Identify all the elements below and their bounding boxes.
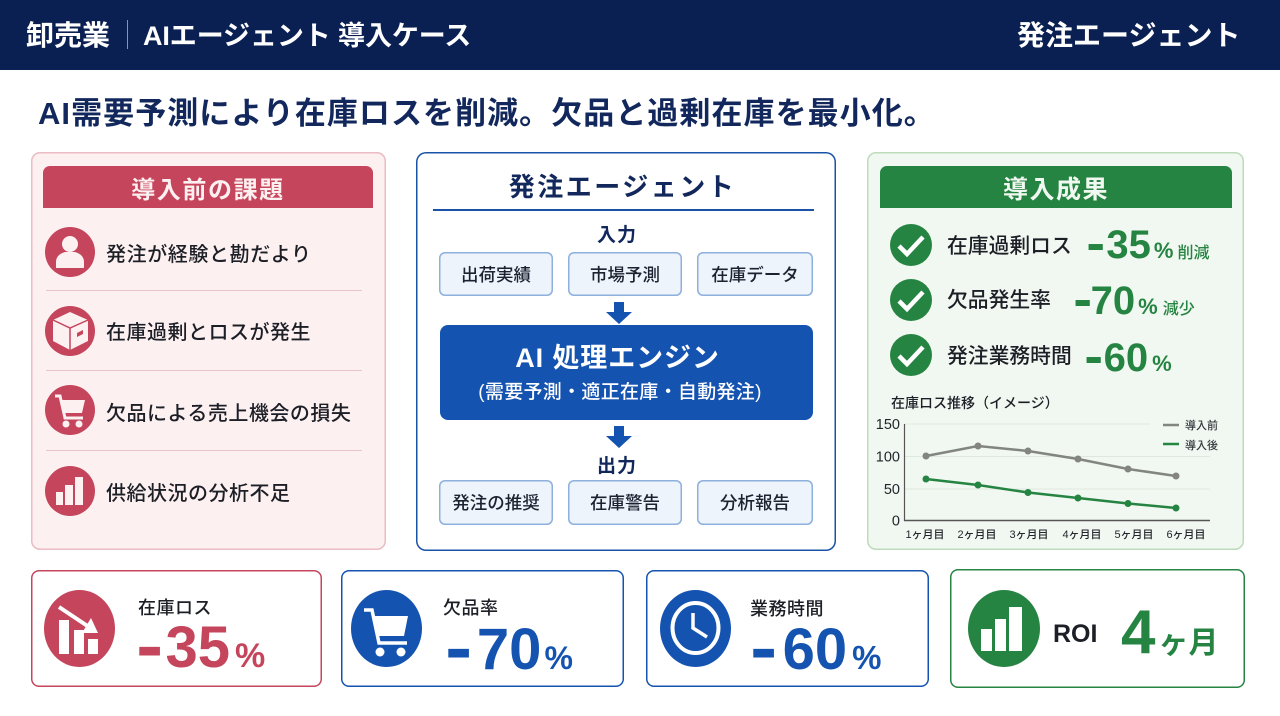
- KPI value: [445, 607, 573, 688]
- engine title: AI 処理エンジン: [515, 343, 720, 373]
- divider 1: [46, 290, 362, 291]
- arrow: engine to output: [606, 426, 632, 448]
- panel: ordering agent flow: [416, 152, 836, 551]
- panel heading: results: 導入成果: [1003, 176, 1109, 204]
- series: after introduction: [923, 476, 1179, 511]
- panel: results: [867, 152, 1244, 550]
- divider 3: [46, 450, 362, 451]
- issue text: 欠品による売上機会の損失: [106, 403, 351, 425]
- heading underline: [433, 209, 814, 210]
- y axis labels: 100: [876, 450, 900, 466]
- x axis labels: 1ヶ月目: [905, 528, 945, 541]
- KPI value: 35%: [166, 615, 265, 680]
- y axis labels: [876, 417, 900, 530]
- KPI value: [750, 607, 881, 688]
- icon: person: [45, 227, 95, 277]
- icon: cart: [45, 385, 95, 435]
- icon: cart: [351, 590, 422, 667]
- KPI value: 70%: [477, 617, 573, 682]
- header bar: [0, 0, 1280, 70]
- KPI value: [136, 605, 265, 686]
- input: shipment records: 出荷実績: [461, 265, 531, 285]
- result value: [1086, 216, 1210, 271]
- x axis labels: 6ヶ月目: [1166, 528, 1206, 541]
- series: before introduction: [923, 443, 1179, 479]
- icon: bar chart: [45, 466, 95, 516]
- output boxes: [439, 480, 813, 525]
- issue: overstock and loss: [45, 306, 311, 356]
- issue: lack of supply analysis: [45, 466, 290, 516]
- KPI label: 欠品率: [443, 598, 498, 618]
- KPI value: 60%: [783, 617, 881, 682]
- result value: -: [1086, 216, 1105, 271]
- x axis labels: 3ヶ月目: [1009, 528, 1049, 541]
- chart legend: 導入前: [1185, 418, 1218, 432]
- arrow: input to engine: [606, 302, 632, 324]
- AI processing engine: [440, 325, 813, 420]
- result: stockout rate: [890, 272, 1195, 327]
- panel heading: results: [880, 166, 1232, 208]
- result value: -: [1084, 329, 1103, 384]
- x axis labels: [905, 528, 1206, 541]
- issue text: 供給状況の分析不足: [106, 483, 290, 505]
- input: market forecast: [568, 252, 682, 296]
- chart legend: [1163, 418, 1218, 452]
- panel heading: issues: 導入前の課題: [131, 177, 285, 204]
- result label: 発注業務時間: [947, 345, 1072, 368]
- x axis labels: 4ヶ月目: [1062, 528, 1102, 541]
- output: analysis report: [697, 480, 813, 525]
- y axis labels: 50: [884, 482, 900, 498]
- icon: box: [45, 306, 95, 356]
- x axis labels: 5ヶ月目: [1114, 528, 1154, 541]
- KPI label: 在庫ロス: [138, 598, 212, 618]
- header agent name: 発注エージェント: [1017, 20, 1240, 51]
- icon: check: [890, 334, 932, 376]
- result value: [1084, 329, 1172, 384]
- icon: declining bars: [44, 590, 115, 667]
- KPI card: work time: [646, 570, 929, 687]
- issue: lost sales from stockouts: [45, 385, 351, 435]
- engine subtitle: (需要予測・適正在庫・自動発注): [478, 382, 762, 403]
- icon: check: [890, 224, 932, 266]
- ROI label: ROI: [1053, 620, 1097, 648]
- input: shipment records: [439, 252, 553, 296]
- result label: 在庫過剰ロス: [947, 235, 1072, 258]
- header vertical divider line: [127, 20, 128, 49]
- input: market forecast: 市場予測: [590, 265, 660, 285]
- output: analysis report: 分析報告: [720, 493, 790, 513]
- issue: ordering by experience: [45, 227, 312, 277]
- KPI value: -: [136, 605, 163, 686]
- input: inventory data: [697, 252, 813, 296]
- output: order recommendation: [439, 480, 553, 525]
- result value: 60%: [1104, 336, 1172, 380]
- chart title: 在庫ロス推移（イメージ）: [891, 395, 1059, 411]
- panel: before introduction issues: [31, 152, 386, 550]
- y axis labels: 0: [892, 514, 900, 530]
- x axis labels: 2ヶ月目: [957, 528, 997, 541]
- icon: check: [890, 279, 932, 321]
- output: inventory alert: 在庫警告: [590, 493, 660, 513]
- panel heading: ordering agent: 発注エージェント: [509, 172, 736, 202]
- result value: [1073, 272, 1195, 327]
- result: ordering work time: [890, 329, 1172, 384]
- icon: clock: [660, 590, 731, 667]
- KPI card: stockout rate: [341, 570, 624, 687]
- output: inventory alert: [568, 480, 682, 525]
- input label: 入力: [597, 225, 637, 246]
- line chart: inventory loss trend: [876, 395, 1218, 541]
- header title: 卸売業: [26, 20, 110, 51]
- result value: 70% 減少: [1091, 279, 1195, 323]
- output label: 出力: [597, 456, 637, 477]
- headline: AI需要予測により在庫ロスを削減。欠品と過剰在庫を最小化。: [38, 96, 936, 131]
- result label: 欠品発生率: [947, 289, 1051, 312]
- input: inventory data: 在庫データ: [711, 265, 799, 285]
- KPI label: 業務時間: [750, 599, 824, 619]
- panel heading: issues: [43, 166, 373, 208]
- ROI value: 4ヶ月: [1121, 598, 1218, 667]
- KPI value: -: [750, 607, 777, 688]
- result: excess inventory loss: [890, 216, 1210, 271]
- issue text: 在庫過剰とロスが発生: [106, 322, 311, 344]
- divider 2: [46, 370, 362, 371]
- KPI value: -: [445, 607, 472, 688]
- header subtitle: AIエージェント 導入ケース: [143, 21, 471, 51]
- KPI card: ROI: [950, 569, 1245, 688]
- output: order recommendation: 発注の推奨: [452, 493, 540, 513]
- result value: 35%削減: [1106, 223, 1210, 267]
- issue text: 発注が経験と勘だより: [106, 244, 312, 266]
- icon: bar chart: [968, 590, 1040, 667]
- chart legend: 導入後: [1185, 438, 1218, 452]
- y axis labels: 150: [876, 417, 900, 433]
- result value: -: [1073, 272, 1092, 327]
- KPI card: inventory loss: [31, 570, 322, 687]
- input boxes: [439, 252, 813, 296]
